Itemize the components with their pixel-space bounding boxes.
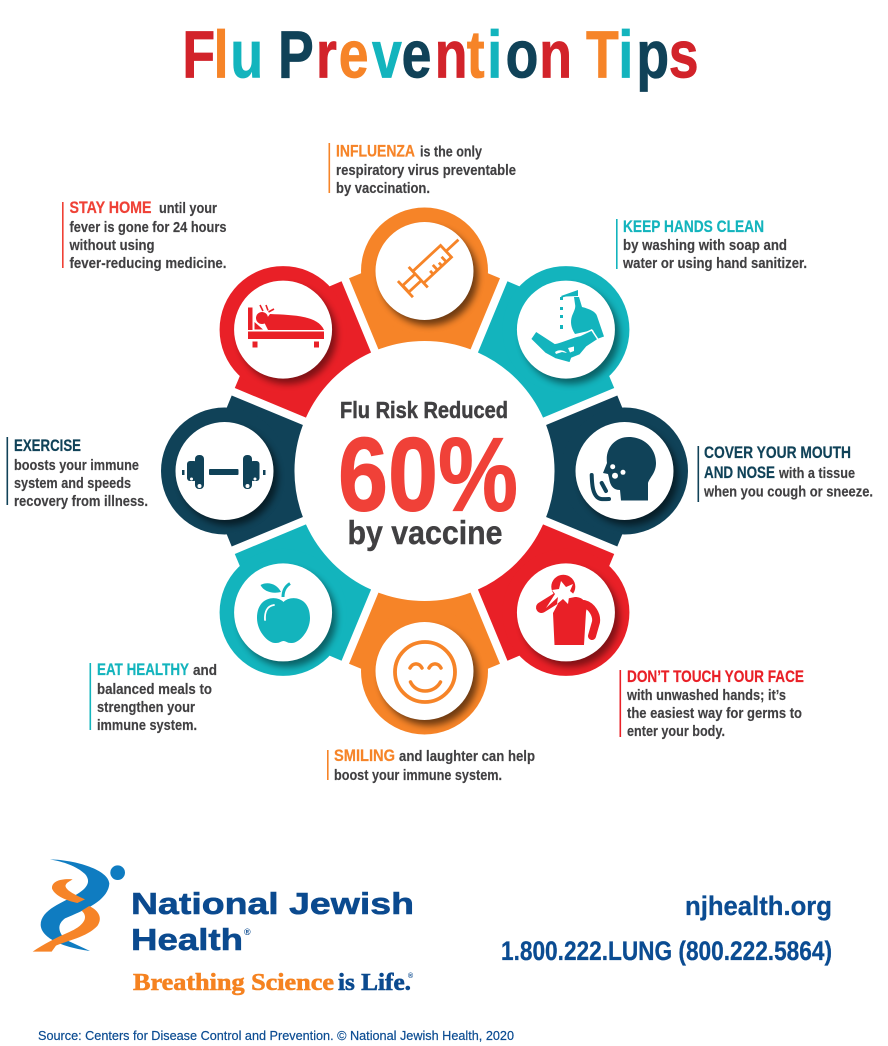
label: flu risk reduced: Flu Risk Reduced — [340, 397, 508, 423]
segment: exercise — [161, 396, 303, 546]
text block: influenza: respiratory virus preventable — [336, 163, 516, 179]
title: T — [586, 17, 619, 92]
title: l — [214, 17, 228, 92]
text block: eat healthy: immune system. — [97, 718, 197, 734]
title: n — [539, 17, 572, 92]
text block: cover your mouth and nose — [698, 444, 873, 502]
title: F — [182, 17, 215, 92]
text block: stay home: STAY HOME — [70, 199, 152, 217]
logo: National Jewish Health: Health — [131, 922, 243, 957]
text block: stay home — [62, 199, 226, 272]
segment: smiling — [349, 593, 500, 734]
title: e — [402, 17, 431, 92]
logo: National Jewish Health: ® — [244, 927, 251, 937]
text block: do not touch your face: enter your body. — [627, 724, 725, 740]
icon: head coughing into hand — [592, 437, 656, 500]
text block: stay home: until your — [159, 201, 217, 217]
icon: dumbbell — [182, 455, 266, 489]
title: n — [435, 17, 468, 92]
source line: Source: Centers for Disease Control and Prevention. © National Jewish Health, 2020 — [38, 1028, 514, 1043]
segment: cover mouth and nose — [546, 396, 688, 546]
text block: exercise: boosts your immune — [14, 458, 139, 474]
title: e — [339, 17, 369, 92]
segment: influenza vaccination — [349, 208, 500, 349]
text block: smiling: and laughter can help — [399, 749, 535, 765]
text block: eat healthy: strengthen your — [97, 700, 195, 716]
text block: cover your mouth and nose: AND NOSE — [704, 464, 775, 482]
text block: exercise: system and speeds — [14, 476, 131, 492]
text block: cover your mouth and nose: with a tissue — [778, 466, 855, 482]
segment: eat healthy — [220, 524, 371, 676]
title: p — [636, 17, 669, 92]
text block: cover your mouth and nose: when you cough or sneeze. — [703, 484, 873, 500]
text block: do not touch your face — [620, 668, 804, 740]
icon: smiling face — [395, 642, 455, 702]
text block: smiling: SMILING — [334, 747, 395, 765]
text block: influenza: is the only — [420, 144, 482, 160]
title: s — [669, 17, 699, 92]
text block: stay home: without using — [69, 238, 154, 254]
text block: keep hands clean — [616, 218, 807, 272]
text block: keep hands clean: by washing with soap and — [623, 238, 787, 254]
text block: smiling: boost your immune system. — [334, 768, 502, 784]
title: o — [506, 17, 538, 92]
logo: National Jewish Health: National Jewish — [131, 886, 414, 921]
text block: exercise: recovery from illness. — [14, 494, 148, 510]
logo: National Jewish Health: ® — [408, 972, 414, 980]
contact details — [501, 891, 832, 966]
title: v — [372, 17, 402, 92]
text block: eat healthy: EAT HEALTHY — [97, 661, 189, 679]
title: P — [278, 17, 314, 92]
text block: keep hands clean: water or using hand sanitizer. — [622, 256, 807, 272]
contact details: njhealth.org — [685, 891, 832, 921]
icon: helix mark — [33, 859, 125, 952]
title: i — [487, 17, 502, 92]
label: by vaccine: by vaccine — [348, 514, 502, 551]
text block: eat healthy — [90, 661, 217, 734]
text block: eat healthy: and — [193, 663, 217, 679]
logo: National Jewish Health — [33, 859, 414, 996]
text block: eat healthy: balanced meals to — [97, 682, 212, 698]
text block: do not touch your face: the easiest way for germs to — [627, 706, 802, 722]
title: r — [316, 17, 337, 92]
text block: cover your mouth and nose: COVER YOUR MOUTH — [704, 444, 851, 462]
text block: keep hands clean: KEEP HANDS CLEAN — [623, 218, 764, 236]
logo: National Jewish Health: is Life. — [338, 970, 411, 996]
text block: smiling — [327, 747, 535, 784]
icon: hands and soap bottle — [530, 290, 604, 363]
segment: keep hands clean — [478, 266, 630, 418]
text block: influenza: by vaccination. — [336, 181, 430, 197]
contact details: 1.800.222.LUNG (800.222.5864) — [501, 936, 832, 966]
title: i — [618, 17, 633, 92]
statistic: 60 percent: 60% — [338, 416, 518, 534]
text block: influenza — [328, 142, 516, 197]
text block: influenza: INFLUENZA — [336, 142, 415, 160]
text block: do not touch your face: with unwashed hands; it’s — [626, 688, 786, 704]
title: u — [230, 17, 263, 92]
icon: person in bed — [248, 305, 324, 348]
text block: stay home: fever is gone for 24 hours — [70, 220, 226, 236]
segment: stay home — [220, 266, 371, 418]
text block: exercise: EXERCISE — [14, 437, 81, 455]
center text — [338, 397, 518, 551]
text block: stay home: fever-reducing medicine. — [70, 256, 226, 272]
icon: person touching face — [542, 575, 596, 645]
text block: exercise — [6, 437, 148, 510]
icon: apple — [257, 583, 310, 643]
logo: National Jewish Health: Breathing Science — [133, 970, 334, 996]
icon: syringe — [396, 229, 468, 299]
title: t — [467, 17, 485, 92]
segment: do not touch your face — [478, 524, 630, 676]
text block: do not touch your face: DON’T TOUCH YOUR FACE — [627, 668, 804, 686]
